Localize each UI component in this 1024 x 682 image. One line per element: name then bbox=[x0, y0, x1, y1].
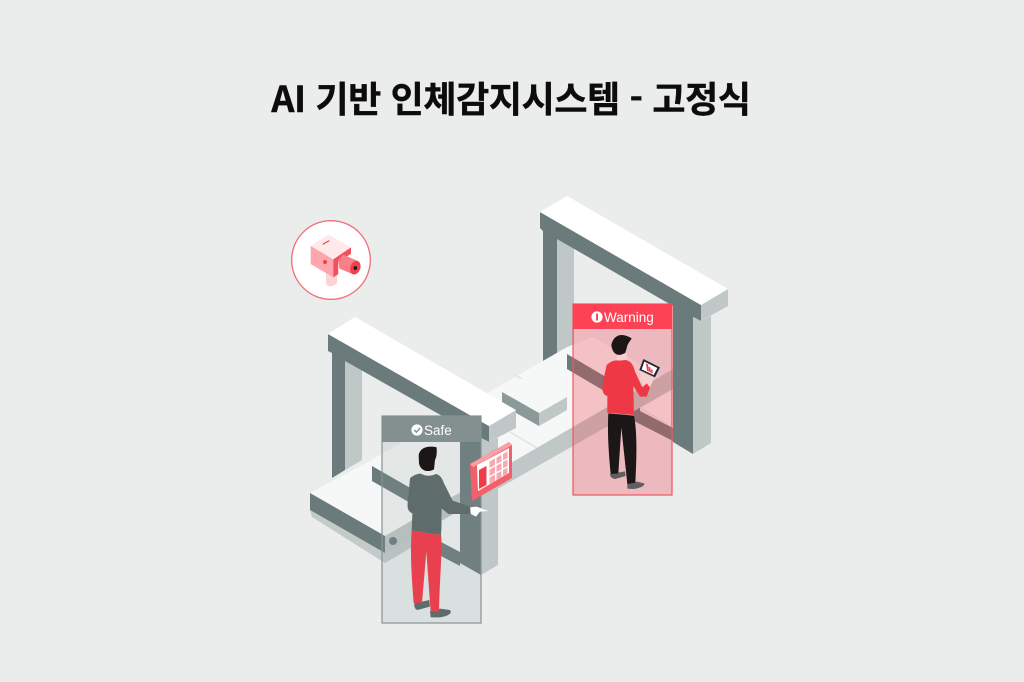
person: safe worker bbox=[408, 447, 488, 617]
conveyor box bbox=[502, 376, 567, 426]
back gate beam and front pillar bbox=[540, 196, 728, 454]
icon: check badge bbox=[411, 424, 423, 436]
conveyor bbox=[310, 337, 673, 566]
control panel bbox=[470, 442, 512, 501]
person: warning worker bbox=[602, 335, 660, 489]
back gate rear pillar bbox=[543, 225, 574, 368]
safe label: Safe bbox=[424, 423, 452, 438]
safe zone box bbox=[382, 416, 481, 623]
title: AI 기반 인체감지시스템 - 고정식 bbox=[270, 71, 751, 123]
warning zone box bbox=[573, 304, 672, 495]
warning label: Warning bbox=[604, 310, 654, 325]
icon: exclamation badge bbox=[591, 311, 603, 323]
icon: CCTV camera badge bbox=[292, 221, 370, 299]
front gate bbox=[328, 317, 516, 575]
